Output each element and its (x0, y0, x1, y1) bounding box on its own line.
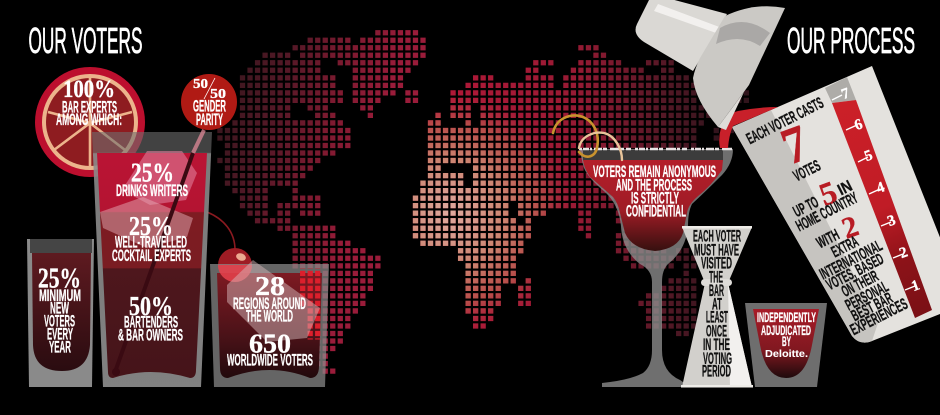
icon: cocktail shaker (636, 0, 785, 130)
text: new voters: MINIMUM (39, 286, 81, 305)
text: adjudicated: BY (782, 333, 791, 349)
text: cocktail experts (112, 211, 191, 265)
text: cocktail experts: 25% (129, 211, 173, 241)
text: adjudicated: Deloitte. (765, 349, 808, 360)
text: must have visited: VISITED (701, 253, 732, 272)
panel: small shot glass (27, 239, 94, 387)
panel: tall glass: COCKTAIL EXPERTS (112, 246, 191, 265)
text: anonymous: AND THE PROCESS (616, 176, 692, 195)
text: must have visited: LEAST (706, 308, 728, 327)
text: OUR VOTERS (28, 20, 142, 61)
panel: tall glass: WELL-TRAVELLED (115, 233, 187, 252)
salt rim (579, 148, 733, 150)
text: new voters: NEW (50, 298, 69, 317)
icon: straw (193, 130, 204, 153)
icon: ice cube (227, 260, 320, 342)
measuring scale (825, 77, 932, 318)
text: with 2 extra international votes: EXTRA (829, 233, 862, 261)
panel: cocktail glass: VOTERS REMAIN ANONYMOUS (593, 162, 716, 181)
text: must have visited: ONCE (706, 322, 727, 341)
text: worldwide voters: 650 (249, 329, 291, 359)
text: up to 5 in home country: HOME COUNTRY (794, 190, 861, 235)
measuring scale: 1 (909, 277, 922, 295)
text: must have visited: THE (709, 268, 723, 287)
text: bartenders (118, 291, 183, 345)
text: with 2 extra international votes: WITH (814, 227, 842, 252)
text: with 2 extra international votes (814, 209, 911, 339)
panel: rocks glass (210, 260, 329, 387)
text: regions: 28 (255, 271, 285, 301)
panel: cocktail glass (553, 116, 733, 387)
panel: measuring glass (732, 66, 940, 343)
text: must have visited: VOTING (703, 349, 732, 368)
measuring scale: 7 (839, 85, 852, 103)
measuring scale: 6 (852, 116, 865, 134)
text: must have visited: PERIOD (702, 362, 731, 381)
text: new voters: YEAR (49, 338, 71, 357)
measuring scale: 3 (885, 212, 898, 230)
panel: tall glass: BARTENDERS (124, 313, 178, 332)
text: with 2 extra international votes: INTERNATIONAL (817, 237, 885, 283)
icon: cherry (207, 212, 252, 282)
text: regions (233, 271, 306, 326)
text: must have visited: IN THE (703, 335, 730, 354)
text: anonymous: CONFIDENTIAL (626, 202, 686, 221)
text: must have visited (693, 227, 741, 381)
text: anonymous: IS STRICTLY (631, 188, 679, 207)
panel: jigger: MUST HAVE (694, 241, 739, 260)
text: with 2 extra international votes: ON THEIR (839, 268, 882, 301)
text: adjudicated: INDEPENDENTLY (757, 309, 816, 325)
panel: tall glass: DRINKS WRITERS (116, 181, 188, 200)
text: 100% bar experts: 100% (63, 76, 115, 103)
icon: grapefruit slice badge (35, 67, 145, 177)
panel: jigger: EACH VOTER (693, 227, 741, 246)
text: adjudicated: ADJUDICATED (761, 322, 811, 338)
text: each voter casts 7 votes: 7 (774, 115, 816, 176)
text: drinks writers (116, 158, 188, 200)
text: new voters (38, 263, 81, 357)
text: must have visited: BAR (709, 281, 724, 300)
panel: tall glass: & BAR OWNERS (118, 326, 183, 345)
text: up to 5 in home country: 5 (814, 173, 842, 213)
text: anonymous (593, 162, 716, 221)
panel: rocks glass: REGIONS AROUND (233, 294, 306, 313)
text: new voters: VOTERS (44, 312, 75, 331)
text: with 2 extra international votes: 2 (837, 209, 863, 246)
text: new voters: 25% (38, 263, 81, 294)
text: must have visited: AT (712, 294, 722, 313)
text: each voter casts 7 votes (744, 95, 827, 185)
panel: tall glass (92, 130, 212, 387)
measuring scale: 4 (874, 179, 887, 197)
icon: gender parity badge: 50 (193, 77, 208, 92)
measuring scale: 2 (897, 244, 910, 262)
panel: deloitte shot glass (745, 303, 827, 387)
text: each voter casts 7 votes: VOTES (791, 157, 824, 185)
text: with 2 extra international votes: VOTES, BASED (824, 251, 887, 294)
icon: grapefruit slice badge: BAR EXPERTS (62, 98, 117, 116)
text: up to 5 in home country: IN (835, 178, 855, 199)
measuring scale: 5 (862, 147, 875, 165)
panel: rocks glass: WORLDWIDE VOTERS (227, 351, 313, 370)
text: drinks writers: 25% (131, 158, 174, 188)
icon: gender parity badge: PARITY (196, 110, 223, 129)
text: 100% bar experts (56, 76, 122, 129)
panel: jigger (681, 226, 753, 388)
icon: gender parity badge: 50 (210, 87, 226, 102)
text: new voters: EVERY (47, 324, 73, 343)
icon: ice cubes (100, 151, 197, 248)
text: regions: THE WORLD (246, 307, 293, 326)
text: bartenders: 50% (129, 291, 173, 321)
dotted world map (217, 33, 751, 371)
text: worldwide voters (227, 329, 313, 370)
text: adjudicated (757, 309, 816, 360)
text: with 2 extra international votes: PERSONAL (843, 278, 892, 314)
icon: gender parity badge: GENDER (193, 96, 226, 116)
icon: grapefruit slice badge: AMONG WHICH: (56, 110, 122, 129)
text: up to 5 in home country: UP TO (791, 194, 822, 221)
icon: orange peel twist (553, 116, 622, 160)
text: up to 5 in home country (791, 173, 861, 235)
text: with 2 extra international votes: BEST BAR (849, 290, 896, 325)
icon: red liquid pour (719, 107, 778, 148)
text: each voter casts 7 votes: EACH VOTER CASTS (744, 95, 827, 148)
icon: gender parity badge (181, 74, 237, 130)
